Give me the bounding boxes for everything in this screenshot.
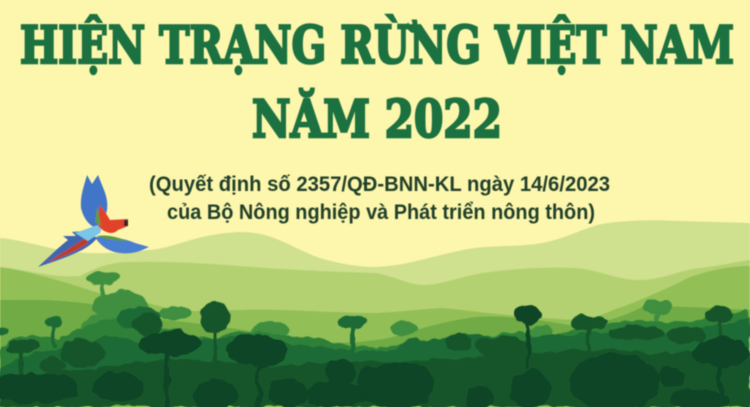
subtitle: (Quyết định số 2357/QĐ-BNN-KL ngày 14/6/2023: [149, 173, 610, 196]
mid trees: [0, 306, 750, 407]
dark trees: [0, 301, 750, 407]
hill layer 3: [0, 266, 750, 407]
hill layer 1: [0, 220, 750, 407]
title: [20, 16, 734, 150]
subtitle: [149, 173, 610, 224]
subtitle: của Bộ Nông nghiệp và Phát triển nông thôn): [167, 201, 595, 224]
hill layer 2: [0, 260, 750, 407]
icon: flying macaw parrot: [38, 175, 149, 267]
mid tree ground: [0, 308, 750, 407]
forest landscape: [0, 220, 750, 407]
title: NĂM 2022: [252, 89, 502, 150]
darkest foreground trees: [0, 305, 750, 407]
back tree layer: [80, 271, 750, 359]
parrot lower wing: [95, 237, 149, 253]
forest trees: [0, 271, 750, 407]
parrot upper wing: [81, 175, 107, 229]
hill layer 4: [0, 300, 750, 407]
parrot tail: [38, 231, 97, 267]
parrot body: [75, 224, 103, 241]
